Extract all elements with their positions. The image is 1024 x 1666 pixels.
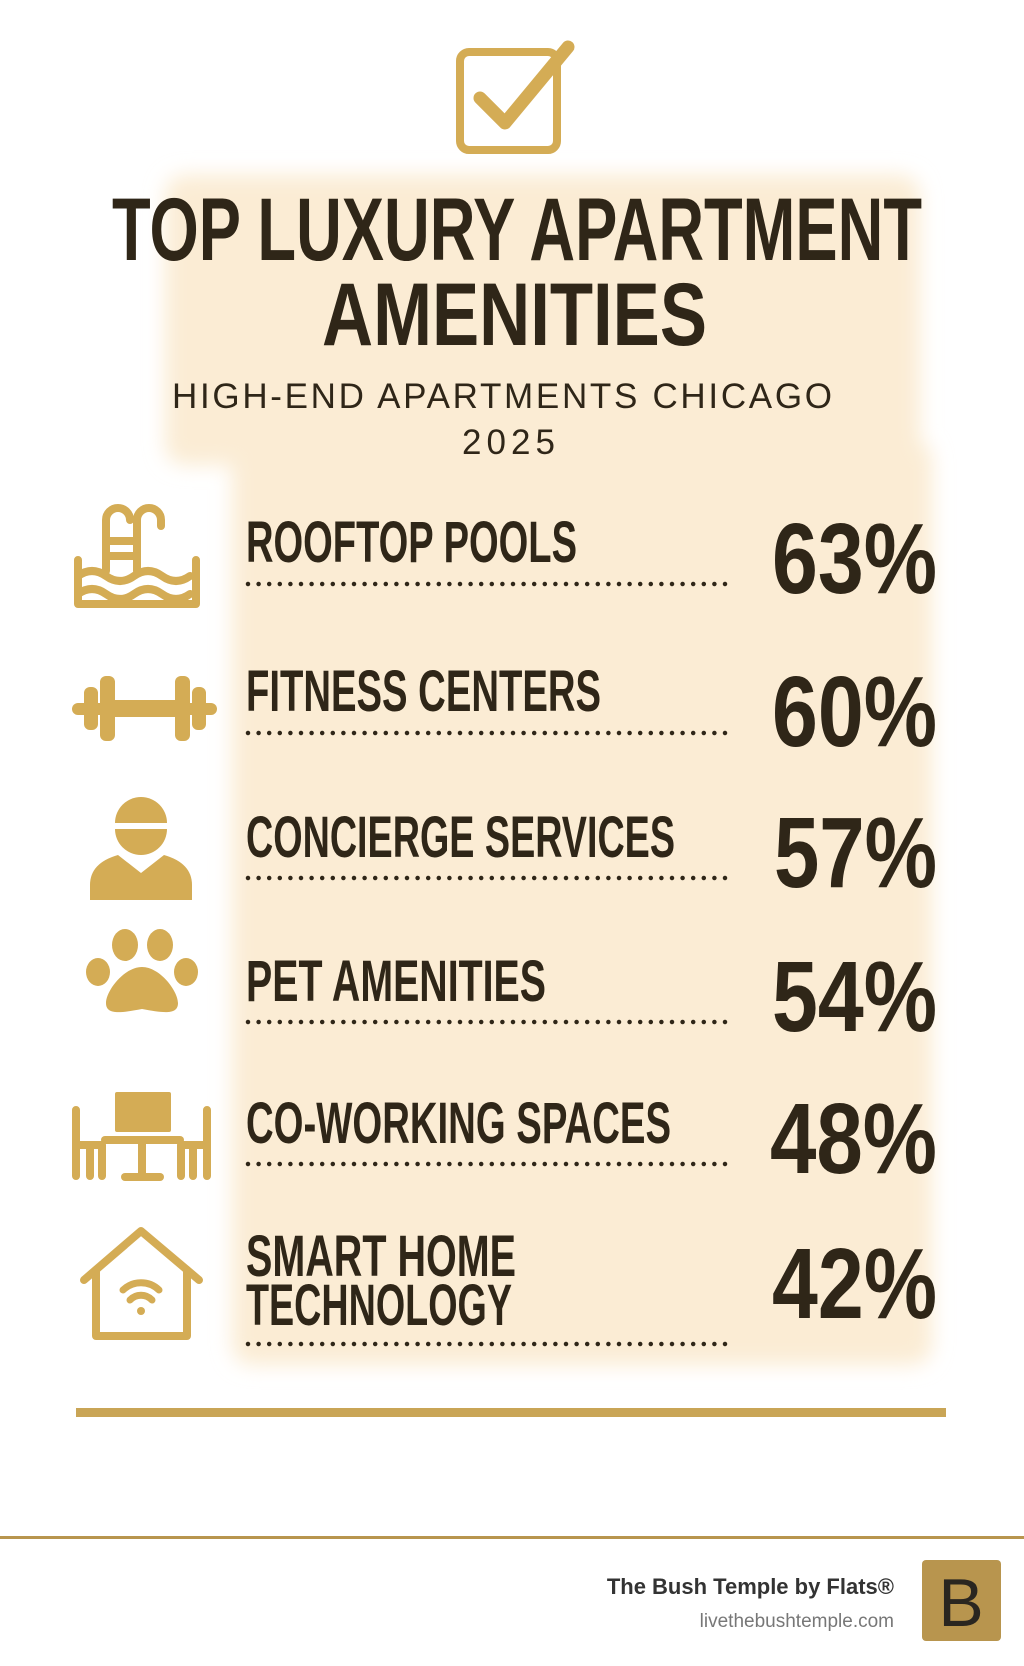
dotted leaders: [248, 584, 731, 1344]
row labels: ROOFTOP POOLS: [246, 510, 577, 575]
row labels: PET AMENITIES: [246, 949, 546, 1014]
percentages: 63%: [772, 503, 937, 615]
row labels: CONCIERGE SERVICES: [246, 805, 675, 870]
row labels: [246, 510, 675, 1338]
percentages: 42%: [772, 1228, 937, 1340]
title: [112, 179, 922, 364]
footer line: [0, 1536, 1024, 1539]
icon: co-working desk: [76, 1094, 207, 1177]
percentages: [770, 503, 937, 1340]
logo: B box: [922, 1560, 1001, 1641]
footer brand text: [607, 1574, 894, 1632]
icon: paw: [86, 929, 198, 1012]
icon: pool: [78, 508, 196, 604]
subtitle: 2025: [462, 423, 555, 462]
footer brand text: livethebushtemple.com: [700, 1611, 894, 1632]
footer brand text: The Bush Temple by Flats®: [607, 1574, 894, 1599]
row labels: CO-WORKING SPACES: [246, 1091, 671, 1156]
icon: smart home: [84, 1231, 199, 1336]
subtitle: HIGH-END APARTMENTS CHICAGO: [172, 377, 832, 416]
percentages: 57%: [774, 797, 937, 909]
title: AMENITIES: [322, 264, 707, 364]
cream background panel: [165, 175, 932, 1365]
gold bar: [76, 1408, 946, 1417]
icon: dumbbell: [72, 676, 217, 741]
percentages: 48%: [770, 1083, 937, 1195]
row labels: FITNESS CENTERS: [246, 659, 601, 724]
subtitle: [172, 377, 832, 462]
icon: concierge: [90, 797, 192, 900]
percentages: 60%: [772, 656, 937, 768]
row labels: TECHNOLOGY: [246, 1273, 512, 1338]
percentages: 54%: [772, 941, 937, 1053]
row labels: SMART HOME: [246, 1224, 516, 1289]
icon: checkbox: [460, 47, 568, 150]
logo: B box: B: [938, 1565, 984, 1641]
